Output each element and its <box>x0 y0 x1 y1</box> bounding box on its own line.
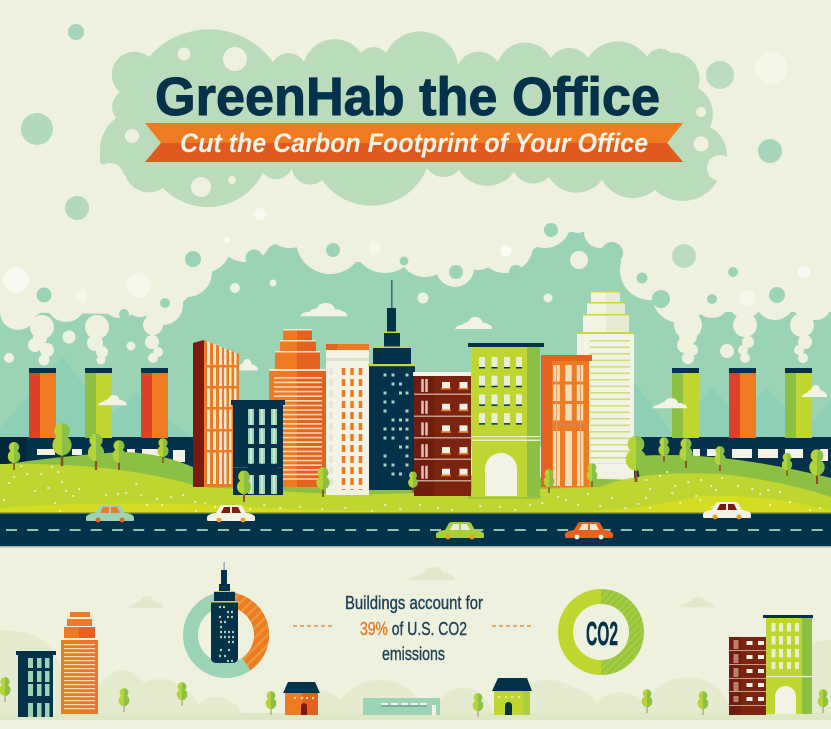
statistic text: Buildings account for <box>345 593 483 613</box>
lower orange building <box>61 612 98 714</box>
orange house <box>283 682 320 715</box>
building: navy block <box>231 400 285 495</box>
lower small clouds <box>128 567 714 608</box>
green house <box>492 678 532 715</box>
title: GreenHab the Office <box>155 67 660 127</box>
lower green building <box>763 615 813 714</box>
car: green <box>436 522 484 539</box>
car: cream <box>207 505 255 522</box>
statistic text: 39% of U.S. CO2 <box>360 619 467 639</box>
dashes right <box>492 625 532 627</box>
ground strip <box>0 713 831 720</box>
subtitle ribbon <box>145 123 683 162</box>
dashes left <box>293 625 333 627</box>
subtitle: Cut the Carbon Footprint of Your Office <box>180 128 648 158</box>
smoke clouds <box>0 222 831 366</box>
factory wall left <box>0 437 200 477</box>
statistic text <box>345 593 483 664</box>
mountains <box>0 357 831 437</box>
donut chart: CO2 <box>566 596 636 668</box>
smokestacks left <box>29 368 168 438</box>
lower navy building <box>16 651 56 717</box>
donut chart: 39 percent <box>190 562 262 670</box>
trees <box>8 423 825 502</box>
building: green with arch <box>468 343 544 499</box>
building: orange slab <box>193 340 239 487</box>
statistic text: emissions <box>382 644 445 664</box>
building: stepped orange tower <box>269 329 326 487</box>
building: navy skyscraper <box>368 280 416 490</box>
small clouds <box>98 303 827 408</box>
donut chart: CO2: CO2 <box>586 615 618 652</box>
icon: skyscraper in donut <box>210 562 239 663</box>
building: orange with tall windows <box>541 355 592 487</box>
factory wall right <box>634 437 831 485</box>
meadow flowers <box>4 466 820 511</box>
building: cream tiered tower <box>577 291 634 477</box>
title cloud <box>96 29 733 207</box>
sky bubbles <box>4 208 810 363</box>
car: cream right <box>703 502 751 519</box>
building: cream tower <box>326 344 369 495</box>
decorative bubbles <box>21 24 787 220</box>
smokestacks right <box>672 368 812 438</box>
car: orange <box>565 522 613 539</box>
hills <box>0 452 831 513</box>
lower brick building <box>729 637 766 715</box>
lower section hills <box>0 630 831 720</box>
car: teal <box>86 505 134 522</box>
teal low building <box>363 698 440 715</box>
lower trees <box>0 677 828 717</box>
road <box>0 512 831 548</box>
sky with smoke edge <box>0 208 831 447</box>
building: brick <box>413 372 471 496</box>
